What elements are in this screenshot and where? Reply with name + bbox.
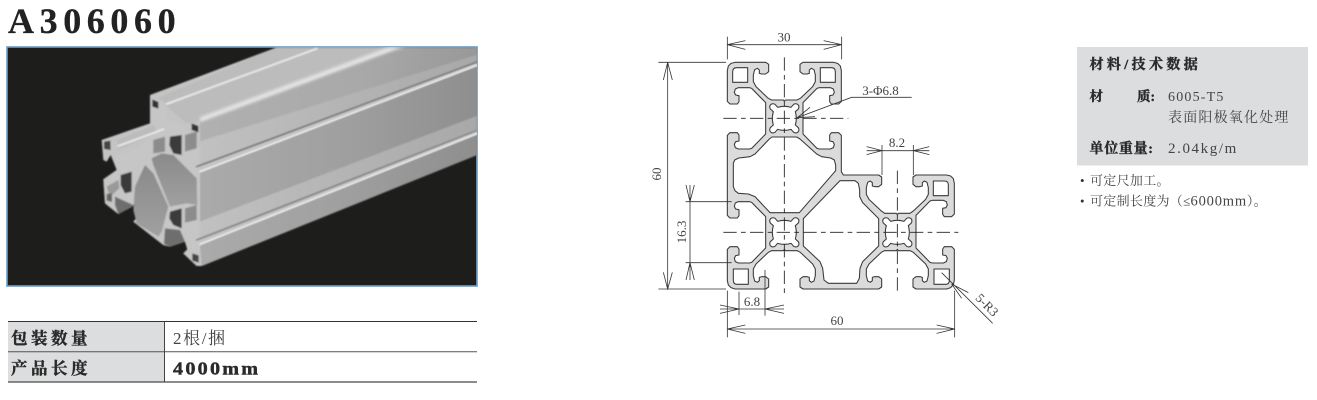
row: product length: 产品长度: [11, 359, 91, 378]
row: product length: 4000mm: [173, 359, 260, 379]
dimension: 60 width: 60: [830, 313, 844, 328]
spec table: [8, 322, 477, 382]
row: product length: [11, 359, 260, 379]
dimension: 60 height: 60: [649, 168, 664, 180]
notes: 可定尺加工。: [1090, 173, 1170, 188]
technical drawing: profile cross section: [649, 30, 1002, 337]
notes: [1080, 173, 1267, 210]
row: package quantity: 2根/捆: [173, 328, 227, 348]
material row: 6005-T5: [1168, 90, 1225, 105]
material row: 材: [1090, 88, 1104, 104]
photo: aluminium extrusion on dark background: [7, 47, 477, 286]
dimension: 6.8: 6.8: [744, 294, 760, 309]
profile outline: [727, 62, 954, 289]
dimension: 30: 30: [778, 30, 790, 44]
title: A306060: [8, 1, 181, 41]
dimension: 5-R3: 5-R3: [973, 290, 1002, 319]
highlights on the extrusion: [118, 47, 477, 244]
notes: •: [1080, 194, 1085, 208]
unit weight row: 单位重量:: [1090, 140, 1154, 157]
notes: •: [1080, 173, 1085, 188]
centre lines: [723, 57, 958, 295]
row: package quantity: 包装数量: [11, 328, 91, 348]
unit weight row: 2.04kg/m: [1168, 141, 1238, 157]
notes: 可定制长度为（≤6000mm）。: [1090, 194, 1267, 210]
dimension lines: [658, 37, 993, 337]
dimension: 3-Φ6.8: 3-Φ6.8: [862, 83, 899, 98]
row: package quantity: [11, 328, 227, 348]
material row: 质:: [1137, 88, 1155, 104]
material row: [1090, 88, 1290, 126]
dimension: 16.3: 16.3: [674, 221, 689, 243]
material row: 表面阳极氧化处理: [1168, 109, 1290, 126]
panel: material and technical data: [1077, 47, 1308, 166]
dimension: 8.2: 8.2: [889, 135, 905, 150]
unit weight row: [1090, 140, 1238, 157]
panel heading: 材料/技术数据: [1090, 56, 1201, 73]
